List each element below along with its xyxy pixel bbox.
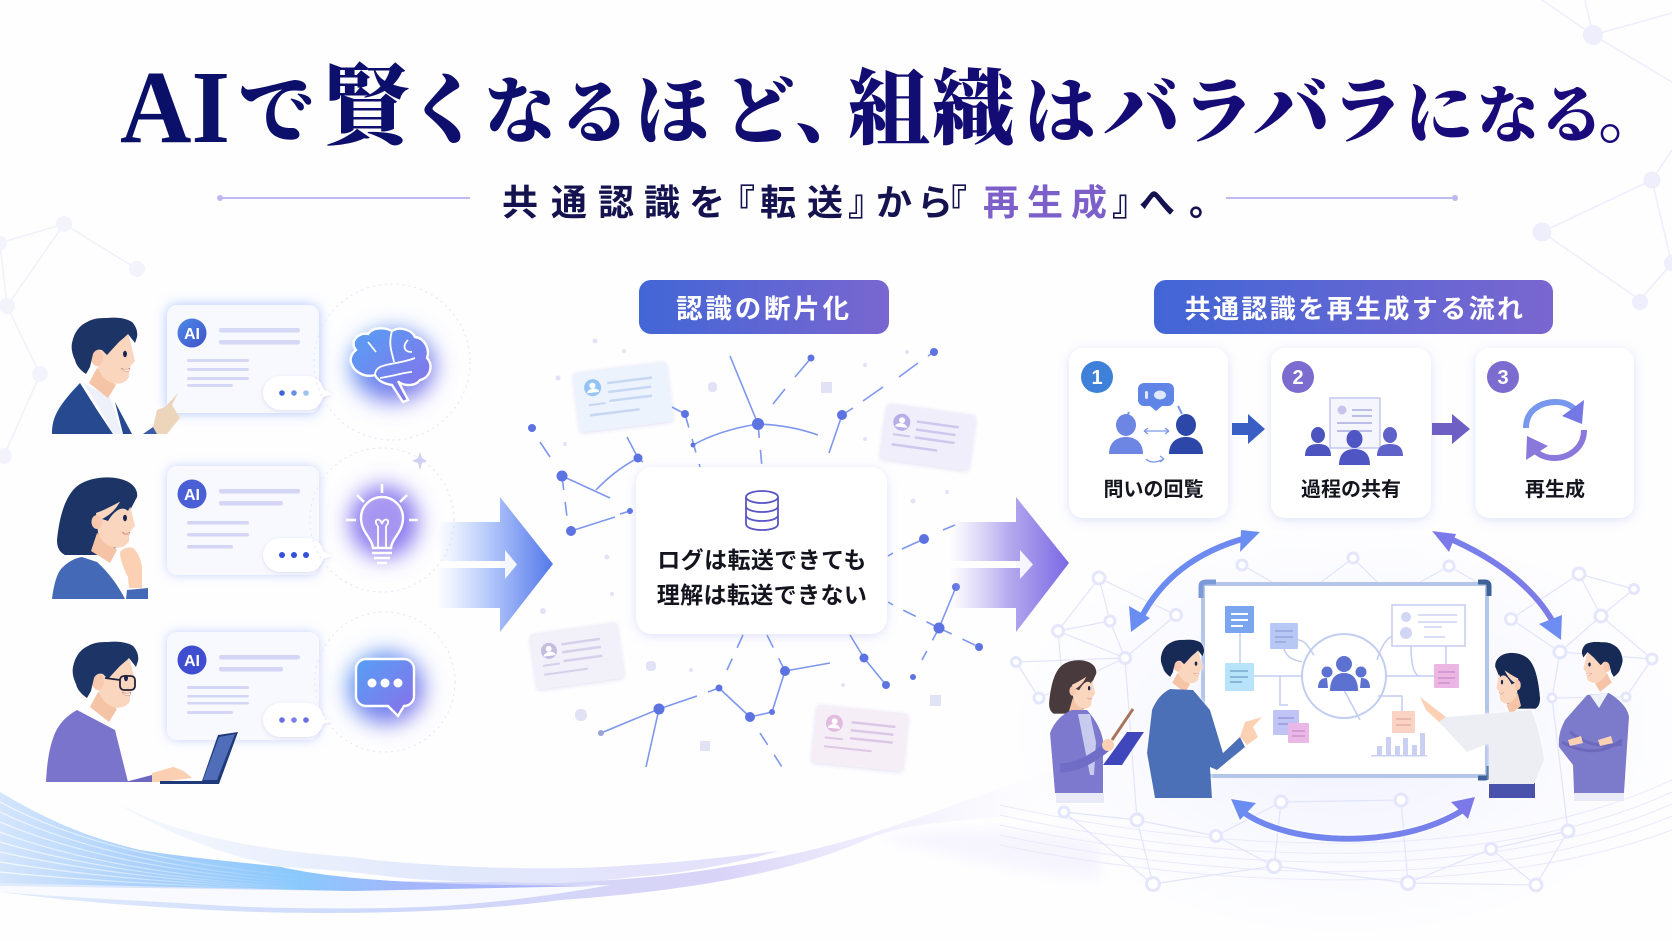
icon: group — [1318, 656, 1370, 691]
title: 組 — [848, 64, 930, 155]
AI chat card: AI — [184, 653, 200, 670]
heading: fragmentation — [639, 280, 889, 334]
subtitle: へ — [1139, 182, 1175, 223]
step 3: regeneration: 再生成 — [1525, 477, 1585, 501]
icon: people with document — [1305, 398, 1403, 465]
subtitle: か — [876, 182, 912, 223]
arrow: step 2 to 3 — [1432, 414, 1470, 444]
person: man with glasses at laptop — [46, 642, 192, 782]
person: man pointing — [52, 318, 180, 434]
icon: refresh — [1526, 400, 1584, 460]
person: woman in white pointing — [1420, 653, 1544, 798]
step 1: circulating questions: 問いの回覧 — [1104, 478, 1204, 501]
subtitle: 転 — [760, 182, 796, 223]
panel: log message: 理解は転送できない — [657, 582, 867, 608]
decorative network: left — [0, 216, 145, 464]
subtitle: 』 — [848, 182, 884, 223]
subtitle: 再 — [983, 182, 1019, 223]
subtitle: 』 — [1112, 182, 1148, 223]
title: る — [560, 76, 630, 153]
title: な — [1477, 83, 1539, 151]
AI chat card — [167, 305, 332, 413]
subtitle: 『 — [719, 182, 755, 223]
arrow: step 1 to 2 — [1232, 414, 1265, 444]
diagram on whiteboard — [1225, 605, 1465, 756]
person: woman thinking — [52, 477, 148, 599]
icon: chat — [315, 612, 455, 752]
step 2: sharing process — [1271, 348, 1431, 518]
step 1: circulating questions — [1069, 348, 1228, 518]
decorative network: top right — [1532, 0, 1672, 310]
title: バ — [1104, 70, 1180, 154]
subtitle: 。 — [1189, 182, 1225, 223]
icon: laptop — [160, 732, 238, 784]
heading: regeneration flow — [1154, 280, 1553, 334]
subtitle: 生 — [1027, 182, 1063, 223]
title: に — [1405, 76, 1473, 152]
subtitle: 通 — [551, 182, 587, 223]
panel: log message: ログは転送できても — [657, 547, 867, 573]
subtitle: を — [689, 182, 725, 223]
row 2: AI card, person, bulb — [52, 448, 454, 599]
title: で — [238, 70, 314, 154]
title: 、 — [795, 70, 871, 154]
profile card: pink — [811, 704, 909, 772]
step 3: regeneration: 3 — [1497, 367, 1509, 389]
person: man with crossed arms — [1559, 642, 1629, 801]
heading: fragmentation: 認識の断片化 — [676, 294, 852, 324]
person: woman with tablet — [1049, 660, 1144, 803]
arrow: fragmentation to regeneration — [950, 497, 1069, 632]
profile card: blue — [573, 361, 673, 433]
fragmented network — [528, 338, 983, 772]
subtitle: 『 — [931, 182, 967, 223]
icon: brain — [314, 284, 470, 440]
subtitle: 送 — [807, 182, 843, 223]
panel: log message — [636, 467, 887, 634]
AI chat card — [167, 632, 332, 740]
icon: people discussing — [1109, 383, 1203, 462]
title: る — [1540, 80, 1604, 151]
subtitle: 成 — [1071, 182, 1107, 223]
whiteboard — [1201, 582, 1489, 778]
subtitle: 識 — [644, 182, 680, 223]
step 1: circulating questions: 1 — [1091, 367, 1103, 389]
title: ラ — [1182, 73, 1254, 153]
title: ラ — [1331, 73, 1403, 153]
title: な — [484, 73, 556, 153]
title: く — [407, 70, 483, 154]
arrow: individuals to fragmentation — [437, 497, 553, 632]
subtitle: 認 — [598, 182, 634, 223]
wave: bottom left ribbon — [0, 770, 1672, 913]
cycle arrow: right — [1432, 531, 1562, 640]
cycle arrow: bottom — [1231, 797, 1475, 839]
subtitle: 共 — [502, 182, 538, 223]
person: man presenting — [1147, 640, 1262, 798]
step 2: sharing process: 2 — [1292, 367, 1304, 389]
cycle arrow: left — [1129, 530, 1260, 632]
subtitle — [217, 182, 1458, 223]
subtitle: ら — [917, 182, 953, 223]
icon: light bulb — [310, 448, 454, 592]
title: 。 — [1598, 79, 1664, 152]
title: は — [1024, 73, 1096, 153]
AI chat card: AI — [184, 487, 200, 504]
step 2: sharing process: 過程の共有 — [1301, 478, 1401, 501]
background network around the team — [1012, 553, 1657, 891]
step 3: regeneration — [1476, 348, 1634, 518]
title: ほ — [636, 72, 710, 154]
AI chat card: AI — [184, 326, 200, 343]
title: バ — [1254, 70, 1330, 154]
title: AI — [120, 50, 230, 165]
heading: regeneration flow: 共通認識を再生成する流れ — [1185, 294, 1525, 324]
row 1: AI card, person, brain — [52, 284, 470, 440]
profile card: grey — [530, 622, 624, 690]
title — [120, 50, 1664, 165]
title: 賢 — [322, 60, 422, 157]
icon: database — [746, 491, 778, 530]
row 3: AI card, person, chat icon — [46, 612, 455, 784]
title: 織 — [932, 64, 1020, 155]
AI chat card — [167, 466, 332, 575]
profile card: lavender — [880, 403, 976, 471]
title: ど — [722, 72, 796, 154]
